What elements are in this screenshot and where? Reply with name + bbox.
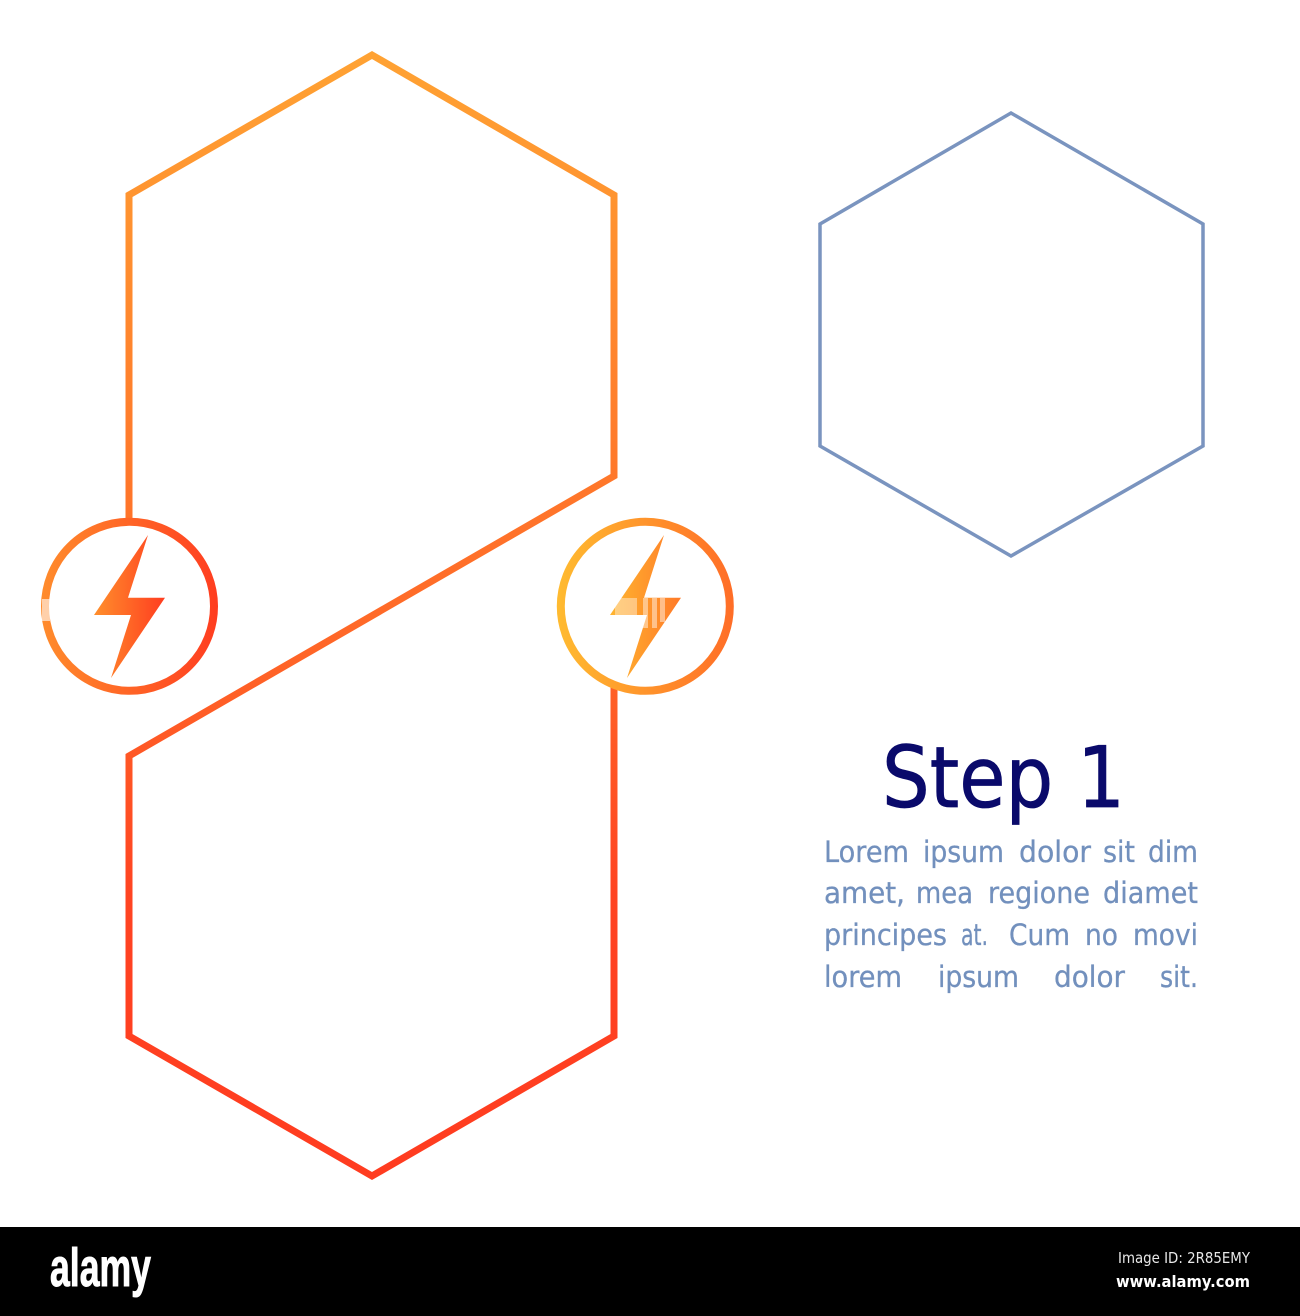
text block: lorem ipsum paragraph: ipsum: [938, 960, 1019, 994]
icon: right lightning badge: [561, 522, 730, 691]
text block: lorem ipsum paragraph: diamet: [1103, 876, 1198, 910]
footer bar: [0, 1227, 1300, 1316]
text block: lorem ipsum paragraph: dolor: [1019, 835, 1091, 869]
footer website: www.alamy.com: [1116, 1272, 1250, 1291]
text block: lorem ipsum paragraph: sit: [1103, 835, 1135, 869]
footer logo: alamy: [50, 1238, 151, 1298]
icon: left lightning badge: [42, 522, 214, 691]
text block: lorem ipsum paragraph: dim: [1148, 835, 1198, 869]
text block: lorem ipsum paragraph: movi: [1133, 918, 1198, 952]
large orange double hexagon outline: [129, 55, 614, 1176]
text block: lorem ipsum paragraph: mea: [916, 876, 973, 910]
text block: lorem ipsum paragraph: [824, 835, 1198, 994]
text block: lorem ipsum paragraph: at.: [961, 918, 988, 952]
text block: lorem ipsum paragraph: Cum: [1009, 918, 1070, 952]
text block: lorem ipsum paragraph: sit.: [1160, 960, 1198, 994]
small blue hexagon outline: [820, 113, 1203, 556]
text block: lorem ipsum paragraph: dolor: [1054, 960, 1125, 994]
text block: lorem ipsum paragraph: ipsum: [923, 835, 1004, 869]
footer image id: Image ID: 2R85EMY: [1118, 1249, 1251, 1267]
text block: lorem ipsum paragraph: no: [1085, 918, 1118, 952]
text block: lorem ipsum paragraph: principes: [824, 918, 947, 952]
heading: Step 1: Step 1: [882, 729, 1125, 828]
text block: lorem ipsum paragraph: regione: [988, 876, 1090, 910]
text block: lorem ipsum paragraph: Lorem: [824, 835, 909, 869]
text block: lorem ipsum paragraph: amet,: [824, 876, 905, 910]
text block: lorem ipsum paragraph: lorem: [824, 960, 902, 994]
